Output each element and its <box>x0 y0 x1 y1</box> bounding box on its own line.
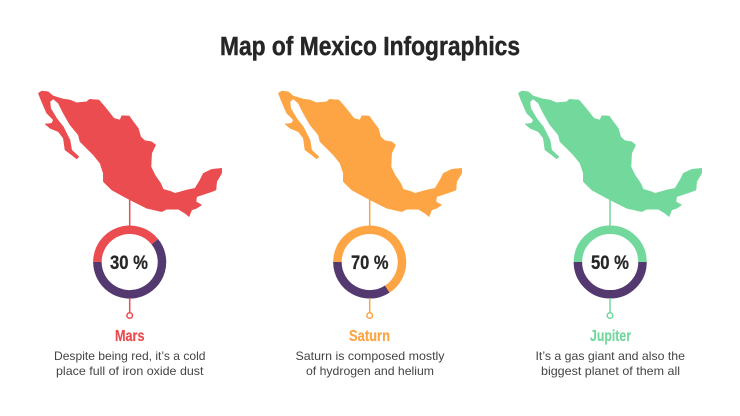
description: place full of iron oxide dust <box>56 364 204 378</box>
percentage: 50 % <box>591 253 629 274</box>
description <box>54 349 206 378</box>
description: of hydrogen and helium <box>306 364 434 378</box>
description: It’s a gas giant and also the <box>536 349 685 363</box>
map: Mexico green <box>518 91 702 217</box>
description <box>296 349 444 378</box>
heading: Saturn: Saturn <box>349 328 390 345</box>
title: Map of Mexico Infographics <box>220 33 520 61</box>
description: Despite being red, it’s a cold <box>54 349 206 363</box>
connector top <box>129 197 131 226</box>
connector top <box>369 197 371 226</box>
map: Mexico orange <box>278 91 462 217</box>
connector bottom with dot <box>367 298 373 318</box>
heading: Mars: Mars <box>115 328 145 345</box>
percentage: 70 % <box>351 253 389 274</box>
description <box>536 349 685 378</box>
panel: Jupiter <box>518 91 702 378</box>
donut chart 30% <box>97 230 162 294</box>
connector bottom with dot <box>607 298 613 318</box>
connector bottom with dot <box>127 298 132 318</box>
donut chart 70% <box>337 230 402 294</box>
percentage: 30 % <box>110 253 148 274</box>
panel: Saturn <box>278 91 462 378</box>
heading: Jupiter: Jupiter <box>590 328 631 345</box>
description: Saturn is composed mostly <box>296 349 444 363</box>
donut chart 50% <box>578 230 642 294</box>
panel: Mars <box>38 91 222 378</box>
description: biggest planet of them all <box>541 364 680 378</box>
connector top <box>609 197 611 226</box>
map: Mexico red <box>38 91 222 217</box>
